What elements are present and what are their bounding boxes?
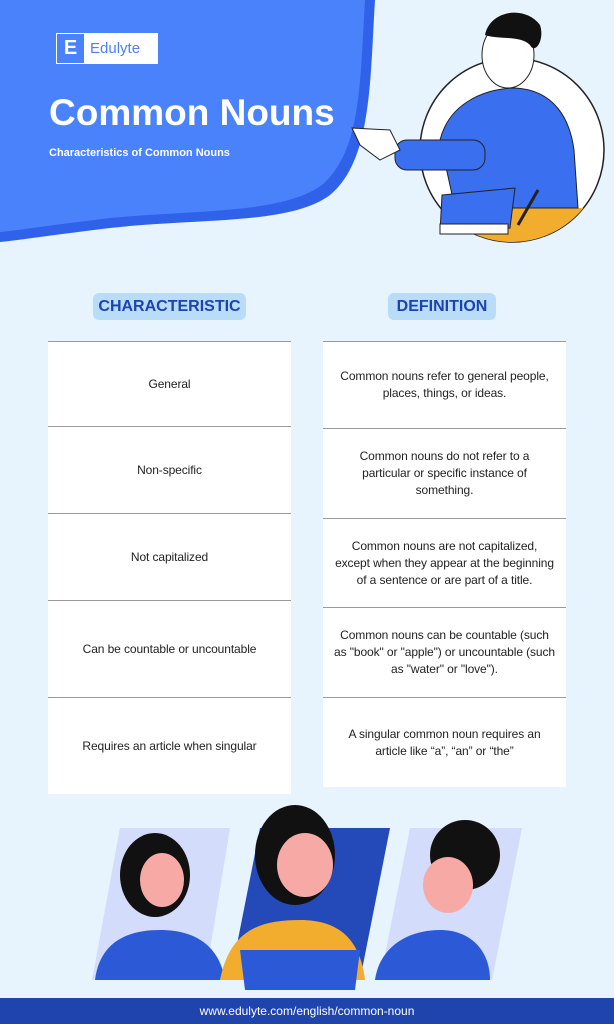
- footer url bar: www.edulyte.com/english/common-noun: [200, 1004, 414, 1018]
- illustration: teacher: [351, 12, 605, 243]
- text: as "water" or "love").: [391, 662, 498, 676]
- text: of a sentence or are part of a title.: [357, 572, 532, 586]
- text: places, things, or ideas.: [383, 386, 506, 400]
- text: Not capitalized: [131, 550, 208, 564]
- text: as "book" or "apple") or uncountable (such: [334, 645, 555, 659]
- text: Common nouns are not capitalized,: [352, 538, 537, 552]
- text: particular or specific instance of: [362, 466, 527, 480]
- text: Common nouns refer to general people,: [340, 369, 549, 383]
- title: Common Nouns: [49, 92, 335, 133]
- text: except when they appear at the beginning: [335, 556, 554, 570]
- subtitle: Characteristics of Common Nouns: [49, 147, 230, 159]
- footer url bar: [0, 998, 614, 1024]
- text: something.: [416, 483, 473, 497]
- text: Can be countable or uncountable: [83, 642, 256, 656]
- text: article like “a”, “an” or “the”: [375, 744, 514, 758]
- text: Non-specific: [137, 462, 202, 476]
- header blob: [0, 0, 375, 242]
- table right column: [323, 341, 566, 787]
- text: General: [148, 376, 190, 390]
- text: Common nouns do not refer to a: [360, 449, 529, 463]
- header: characteristic: [93, 293, 246, 320]
- header: definition: DEFINITION: [397, 298, 487, 314]
- table left column: [48, 341, 291, 794]
- illustration: students: [92, 805, 522, 990]
- logo: Edulyte: [90, 40, 140, 57]
- logo: [56, 33, 158, 64]
- header: definition: [388, 293, 496, 320]
- text: Requires an article when singular: [82, 738, 257, 752]
- logo: E: [64, 37, 77, 59]
- text: A singular common noun requires an: [348, 726, 541, 740]
- header: characteristic: CHARACTERISTIC: [98, 298, 241, 314]
- text: Common nouns can be countable (such: [340, 628, 549, 642]
